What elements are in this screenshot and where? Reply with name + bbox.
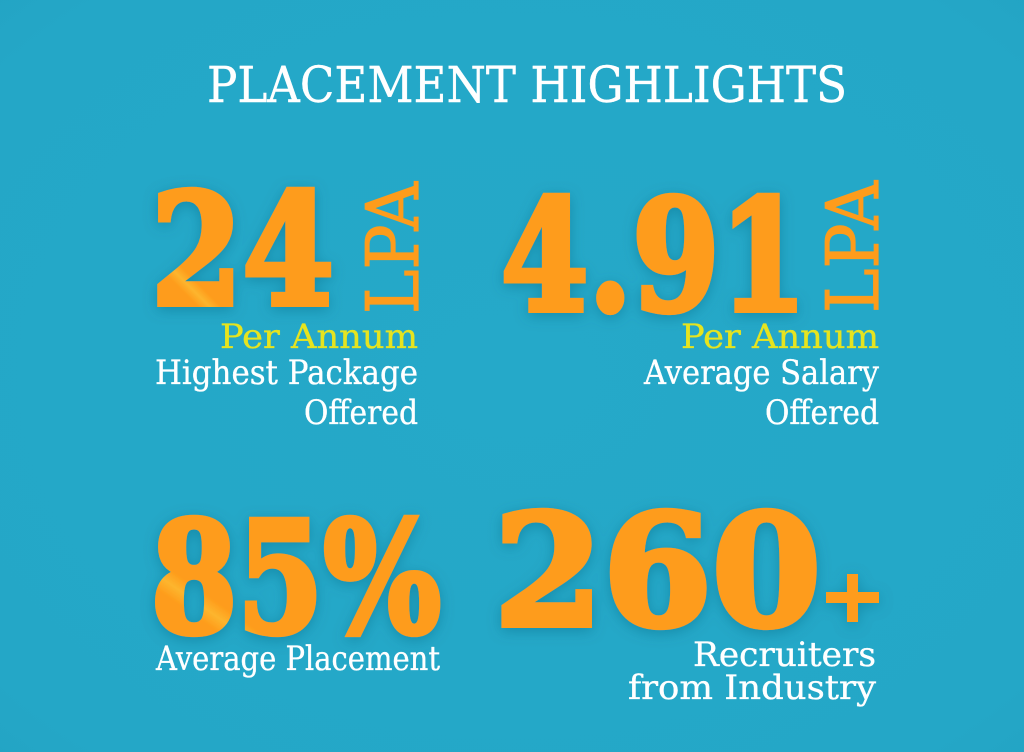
unit: LPA rotated: LPA (811, 180, 895, 313)
stat: 24: 24 (151, 160, 334, 341)
label: average salary: Average Salary (643, 353, 880, 393)
stat: 4.91: 4.91 (501, 166, 807, 347)
label: per annum: Per Annum (681, 317, 879, 357)
label: from industry: from Industry (628, 668, 877, 708)
unit: LPA rotated: LPA (351, 181, 435, 314)
label: offered: Offered (765, 393, 879, 433)
title: PLACEMENT HIGHLIGHTS (207, 56, 847, 114)
label: offered: Offered (304, 393, 418, 433)
label: highest package: Highest Package (155, 353, 418, 393)
label: per annum: Per Annum (220, 317, 418, 357)
panel: average salary (501, 166, 895, 433)
stat: 85%: 85% (151, 488, 441, 669)
panel: average placement (151, 488, 441, 679)
stat: 260+: 260 (494, 481, 821, 662)
panel: highest package (151, 160, 435, 433)
panel: recruiters (494, 481, 879, 708)
label: recruiters: Recruiters (693, 635, 876, 675)
label: average placement: Average Placement (155, 639, 440, 679)
